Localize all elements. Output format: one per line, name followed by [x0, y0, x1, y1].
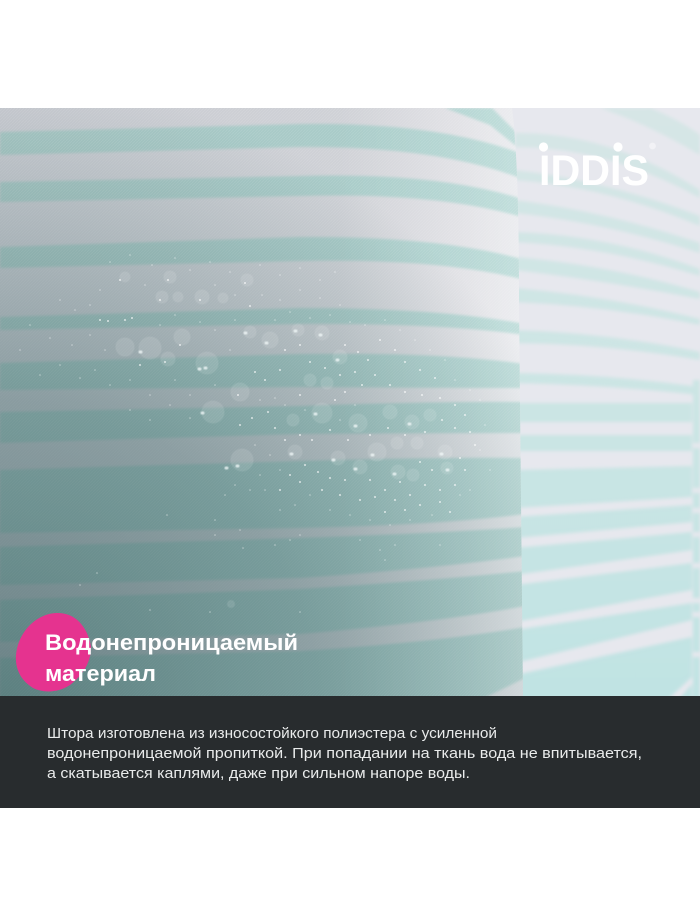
description text: а скатывается каплями, даже при сильном напоре воды.	[47, 765, 470, 782]
water droplets on the fabric	[20, 255, 490, 612]
heading: Водонепроницаемый материал	[45, 630, 298, 686]
logo: IDDIS: IDDIS	[539, 147, 649, 195]
description text	[47, 725, 642, 782]
description text: Штора изготовлена из износостойкого полиэстера с усиленной	[47, 725, 497, 742]
pink accent blob	[16, 613, 91, 691]
dark description panel	[0, 696, 700, 808]
photo: left curtain with teal stripes	[0, 108, 525, 700]
heading: Водонепроницаемый материал: материал	[45, 661, 156, 686]
heading: Водонепроницаемый материал: Водонепроницаемый	[45, 630, 298, 655]
photo: right curtain in background	[505, 108, 700, 700]
description text: водонепроницаемой пропиткой. При попадании на ткань вода не впитывается,	[47, 745, 642, 762]
